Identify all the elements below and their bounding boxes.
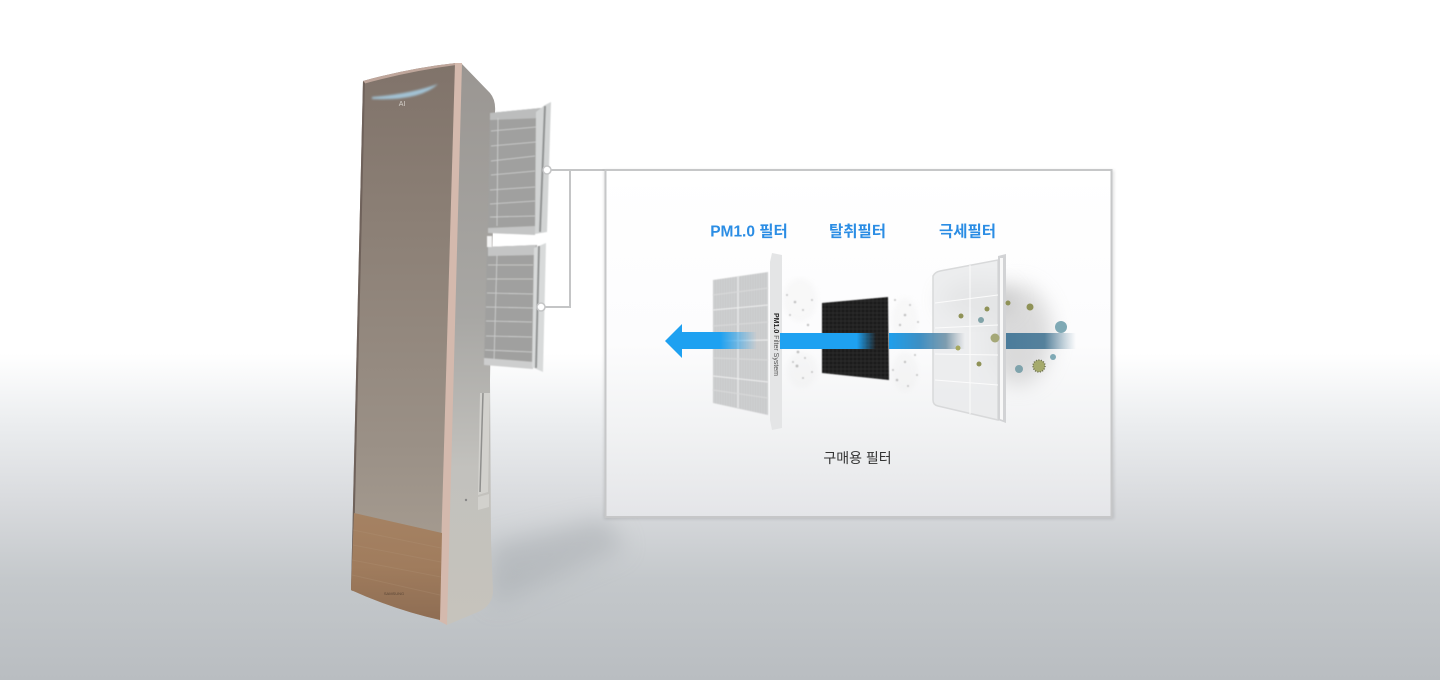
PM1.0 filter <box>713 253 782 430</box>
brand mark: AI <box>399 101 405 108</box>
wood grain <box>352 530 441 595</box>
unit front panel <box>351 63 456 620</box>
arrow segment after micro filter <box>889 333 965 349</box>
heading: PM1.0 filter: PM1.0 필터 <box>710 222 788 240</box>
arrow outlet segment with head <box>665 324 757 358</box>
air conditioner unit <box>351 63 495 625</box>
side lower seams <box>478 393 490 510</box>
connector lines with circle markers <box>537 166 605 311</box>
display light bar <box>372 84 438 99</box>
unit side panel <box>438 63 495 625</box>
left trim <box>351 81 365 591</box>
filter label: PM1.0 Filter System <box>772 313 779 376</box>
panel: filter detail <box>606 170 1112 517</box>
top trim <box>363 63 456 84</box>
upper filter door <box>488 102 551 235</box>
right rose-gold trim <box>439 63 462 625</box>
heading: deodorizing filter: 탈취필터 <box>829 222 886 240</box>
heading: micro filter: 극세필터 <box>939 222 996 240</box>
lower filter door <box>484 236 546 372</box>
dust cloud between filters <box>783 278 919 392</box>
arrow segment through carbon filter <box>780 333 876 349</box>
deodorizing carbon filter <box>822 297 889 380</box>
wood panel <box>351 513 442 620</box>
Samsung logo: SAMSUNG <box>384 591 404 596</box>
floor shadow of the unit <box>490 518 625 605</box>
air flow arrow <box>665 324 1076 358</box>
micro filter with dust <box>933 254 1052 423</box>
panel shadow <box>604 170 1114 519</box>
arrow inlet segment <box>1006 333 1076 349</box>
caption: 구매용 필터 <box>823 450 892 466</box>
dust particles <box>956 300 1067 373</box>
